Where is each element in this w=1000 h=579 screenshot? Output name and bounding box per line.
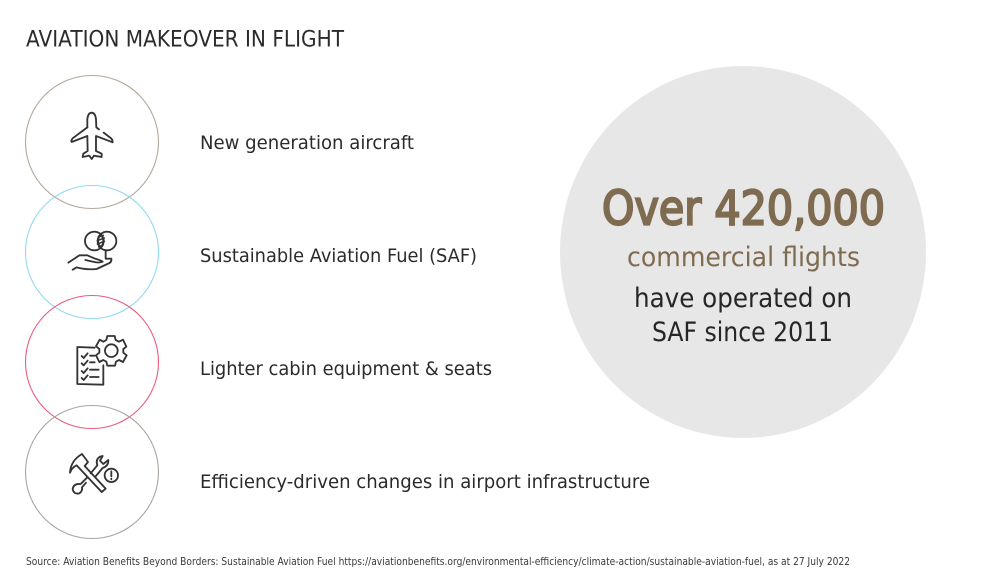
label: sustainable aviation fuel: Sustainable Aviation Fuel (SAF) [200, 245, 477, 267]
big number: Over 420,000 [602, 182, 885, 236]
circle: lighter cabin equipment [26, 296, 158, 428]
panel: aviation measures list [26, 76, 650, 538]
circle: sustainable aviation fuel [26, 186, 158, 318]
circle: airport infrastructure [26, 406, 158, 538]
circle: new generation aircraft [26, 76, 158, 208]
callout background circle [560, 66, 926, 438]
icon: hand holding SAF [68, 232, 116, 270]
icon: checklist and gear [77, 336, 127, 385]
label: lighter cabin equipment: Lighter cabin equipment & seats [200, 358, 492, 380]
icon: airplane [71, 113, 113, 159]
label: new generation aircraft: New generation aircraft [200, 132, 414, 154]
icon: hammer and wrench [70, 454, 118, 494]
statement line 2: SAF since 2011 [652, 317, 833, 348]
subheading: commercial flights [627, 242, 860, 273]
title: AVIATION MAKEOVER IN FLIGHT [26, 28, 345, 52]
callout: SAF flights statistic [560, 66, 926, 438]
statement line 1: have operated on [634, 283, 852, 314]
source note: Source: Aviation Benefits Beyond Borders: Sustainable Aviation Fuel https://aviationbenefits.org/environmental-efficiency/climate-action/sustainable-aviation-fuel, as at 27 July 2022 [26, 556, 850, 568]
label: airport infrastructure: Efficiency-driven changes in airport infrastructure [200, 471, 650, 493]
